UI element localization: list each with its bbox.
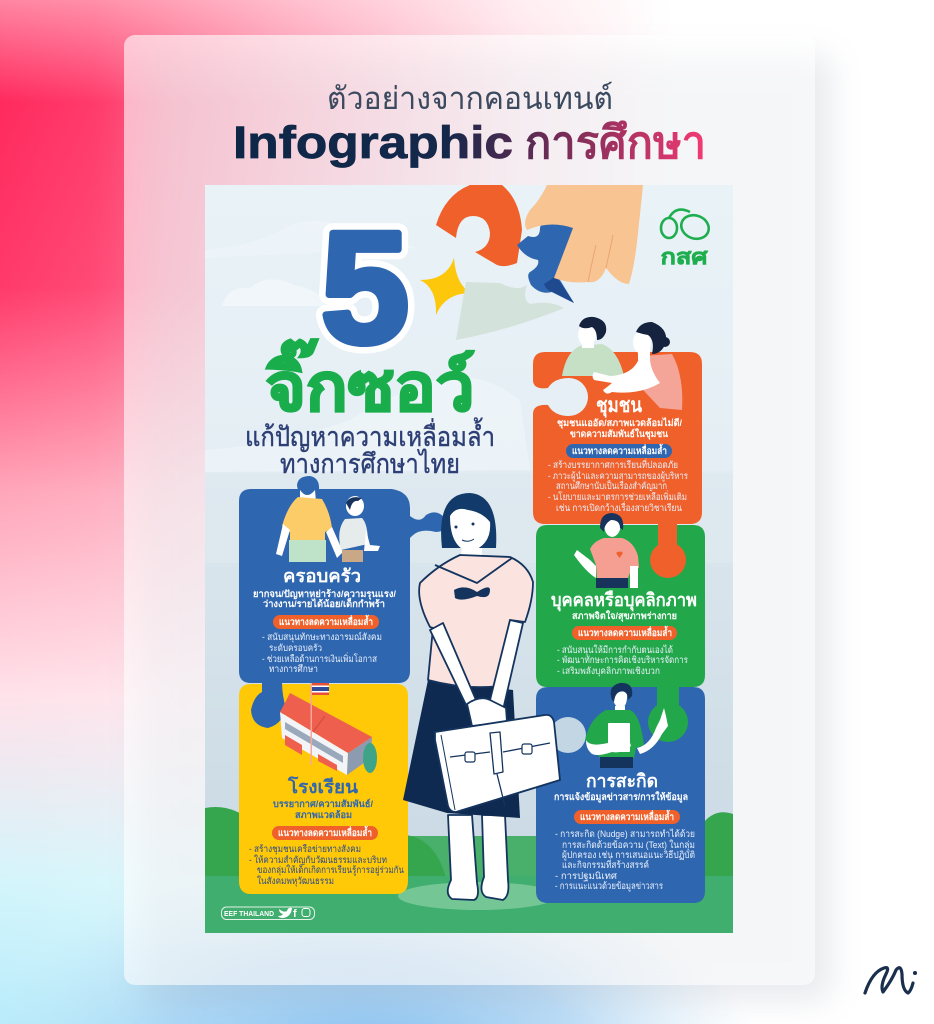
- panel: nudge: การแจ้งข้อมูลข่าวสาร/การให้ข้อมูล: [554, 791, 688, 804]
- panel: school: บรรยากาศ/ความสัมพันธ์/: [273, 798, 373, 810]
- heading: จิ๊กซอว์: [266, 338, 474, 424]
- title: ตัวอย่างจากคอนเทนต์: [327, 81, 613, 116]
- panel: school: โรงเรียน: [287, 776, 359, 797]
- title: [233, 81, 706, 168]
- card panel: [124, 35, 830, 1000]
- panel: individual personality: - เสริมพลังบุคลิกภาพเชิงบวก: [557, 666, 660, 677]
- heading: ทางการศึกษาไทย: [280, 449, 460, 479]
- panel: family: - สนับสนุนทักษะทางอารมณ์สังคม: [262, 631, 382, 643]
- green hills and ground: [205, 807, 733, 933]
- panel: community: - นโยบายและมาตรการช่วยเหลือเพิ่มเติม: [548, 490, 687, 503]
- panel: community: แนวทางลดความเหลื่อมล้ำ: [572, 443, 667, 457]
- title number 5: 5: [321, 200, 409, 376]
- icon: twitter: [278, 908, 292, 918]
- icon: hand holding blue puzzle piece: [517, 185, 643, 303]
- panel: family: [239, 476, 446, 683]
- logo: brand mark: [865, 968, 916, 993]
- illustration: parent and child: [276, 476, 380, 562]
- title number 5: 5: [321, 200, 409, 376]
- panel: nudge: - การสะกิด (Nudge) สามารถทำได้ด้วย: [555, 828, 695, 840]
- icon: orange puzzle piece: [436, 185, 522, 266]
- panel: nudge: แนวทางลดความเหลื่อมล้ำ: [580, 809, 674, 823]
- title: การศึกษา: [525, 117, 706, 168]
- panel: nudge: การสะกิดด้วยข้อความ (Text) ในกลุ่ม: [562, 839, 695, 851]
- panel: family: แนวทางลดความเหลื่อมล้ำ: [279, 614, 373, 628]
- panel: nudge: - การปฐมนิเทศ: [555, 871, 617, 882]
- panel: nudge: การสะกิด: [586, 771, 658, 791]
- panel: school: - ให้ความสำคัญกับวัฒนธรรมและบริบท: [249, 854, 387, 866]
- legs: [448, 815, 478, 900]
- panel: family: - ช่วยเหลือด้านการเงินเพิ่มโอกาส: [262, 652, 377, 665]
- panel: individual personality: สภาพจิตใจ/สุขภาพร่างกาย: [572, 610, 677, 622]
- panel: family: ว่างงาน/รายได้น้อย/เด็กกำพร้า: [263, 597, 385, 610]
- illustration: girl in pink shirt: [574, 513, 639, 588]
- panel: community: ขาดความสัมพันธ์ในชุมชน: [570, 428, 668, 440]
- panel: family: ยากจน/ปัญหาหย่าร้าง/ความรุนแรง/: [253, 588, 396, 600]
- illustration: school building and flag: [280, 683, 377, 775]
- panel: community: สถานศึกษานับเป็นเรื่องสำคัญมาก: [556, 479, 667, 492]
- panel: school: [239, 680, 408, 894]
- hair back: [441, 493, 496, 548]
- panel: school: ของกลุ่มให้เด็กเกิดการเรียนรู้การอยู่ร่วมกัน: [257, 863, 404, 876]
- heading: แก้ปัญหาความเหลื่อมล้ำ: [245, 417, 495, 452]
- panel: school: - สร้างชุมชนเครือข่ายทางสังคม: [249, 844, 361, 855]
- panel: individual personality: - พัฒนาทักษะการคิดเชิงบริหารจัดการ: [557, 655, 688, 666]
- panel: family: ครอบครัว: [283, 566, 361, 586]
- panel: individual personality: แนวทางลดความเหลื่อมล้ำ: [578, 625, 672, 639]
- panel: community: ชุมชนแออัด/สภาพแวดล้อมไม่ดี/: [557, 417, 682, 429]
- panel: family: ระดับครอบครัว: [269, 643, 322, 654]
- panel: community: - ภาวะผู้นำและความสามารถของผู้บริหาร: [548, 471, 688, 482]
- bow: [454, 587, 490, 600]
- panel: individual personality: [536, 513, 705, 687]
- panel: nudge: - การแนะแนวด้วยข้อมูลข่าวสาร: [555, 881, 663, 892]
- panel: school: สภาพแวดล้อม: [295, 809, 352, 821]
- icon: instagram: [302, 908, 310, 916]
- panel: family: ทางการศึกษา: [269, 664, 318, 675]
- skirt: [403, 680, 520, 818]
- panel: school: แนวทางลดความเหลื่อมล้ำ: [278, 825, 372, 839]
- panel: school: ในสังคมพหุวัฒนธรรม: [257, 875, 334, 887]
- social handle badge: EEF THAILAND: [224, 911, 274, 918]
- infographic poster: [205, 185, 733, 933]
- bag: [435, 715, 560, 812]
- panel: community: ชุมชน: [596, 395, 642, 418]
- title: Infographic: [233, 117, 513, 168]
- logo: EEF: กสศ: [660, 246, 708, 269]
- icon: puzzle tab from family: [251, 680, 285, 728]
- panel: nudge: และกิจกรรมที่สร้างสรรค์: [562, 858, 649, 871]
- panel: nudge: ผู้ปกครอง เช่น การเสนอแนะวิธีปฏิบัติ: [562, 849, 695, 861]
- clouds background: [205, 221, 733, 563]
- panel: community: - สร้างบรรยากาศการเรียนที่ปลอดภัย: [548, 458, 678, 471]
- panel: individual personality: - สนับสนุนให้มีการกำกับตนเองได้: [557, 644, 673, 656]
- face features: [454, 526, 458, 528]
- logo: EEF: [660, 210, 712, 269]
- icon: yellow sparkle: [420, 258, 471, 315]
- face: [450, 509, 490, 552]
- illustration: student with bag: [403, 493, 560, 900]
- social handle badge: f: [293, 908, 297, 920]
- panel: community: [533, 317, 702, 578]
- illustration: man with clipboard: [585, 683, 668, 768]
- panel: nudge: [536, 683, 705, 903]
- heading: [245, 338, 495, 479]
- social handle badge: [222, 907, 314, 920]
- panel: individual personality: บุคคลหรือบุคลิกภาพ: [551, 590, 697, 612]
- illustration: two community members: [562, 317, 682, 410]
- arms: [430, 623, 476, 707]
- icon: pale puzzle piece: [456, 282, 564, 340]
- blouse: [419, 555, 533, 687]
- panel: community: เช่น การเปิดกว้างเรื่องสายวิชาเรียน: [556, 501, 682, 514]
